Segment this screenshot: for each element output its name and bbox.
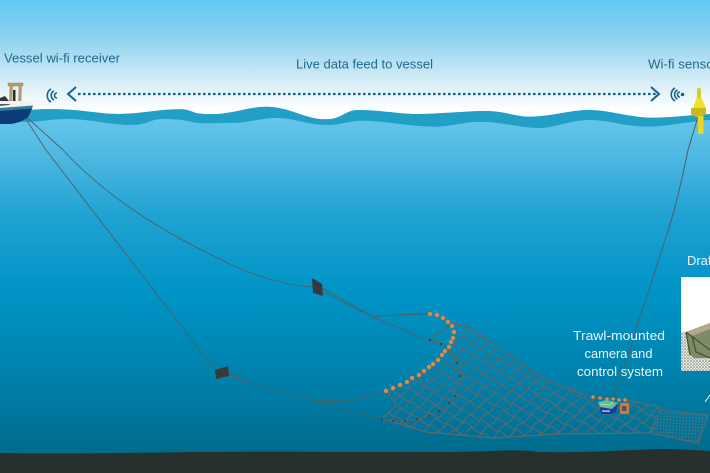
label: vessel wi-fi receiver: Vessel wi-fi receiver xyxy=(4,50,121,66)
label: trawl-mounted camera and control system: camera and xyxy=(584,346,652,361)
label: trawl-mounted camera and control system: Trawl-mounted xyxy=(573,328,665,343)
background: water column xyxy=(0,107,710,457)
camera and control system xyxy=(598,400,629,414)
fishing vessel xyxy=(0,83,33,124)
label: trawl-mounted camera and control system xyxy=(573,328,665,379)
pointer line xyxy=(705,395,710,402)
ground rope weights xyxy=(381,339,461,422)
trawl net xyxy=(370,305,708,445)
label: trawl-mounted camera and control system: control system xyxy=(577,364,663,379)
tow ropes xyxy=(22,113,440,419)
trawl door upper xyxy=(312,278,323,296)
buoy xyxy=(691,88,706,134)
background: sky xyxy=(0,0,710,135)
buoy cable xyxy=(613,120,697,397)
wave band xyxy=(0,107,710,128)
ground rope xyxy=(382,326,461,421)
trawl door lower xyxy=(215,366,229,379)
seabed xyxy=(0,449,710,473)
codend xyxy=(650,410,708,443)
label: live data feed: Live data feed to vessel xyxy=(296,56,433,72)
photo: draft trawl model xyxy=(681,277,710,371)
arrow: data feed xyxy=(68,87,659,101)
icon: sensor wi-fi signal xyxy=(671,88,684,101)
icon: vessel wi-fi signal xyxy=(47,89,57,102)
float line dots xyxy=(384,312,627,402)
